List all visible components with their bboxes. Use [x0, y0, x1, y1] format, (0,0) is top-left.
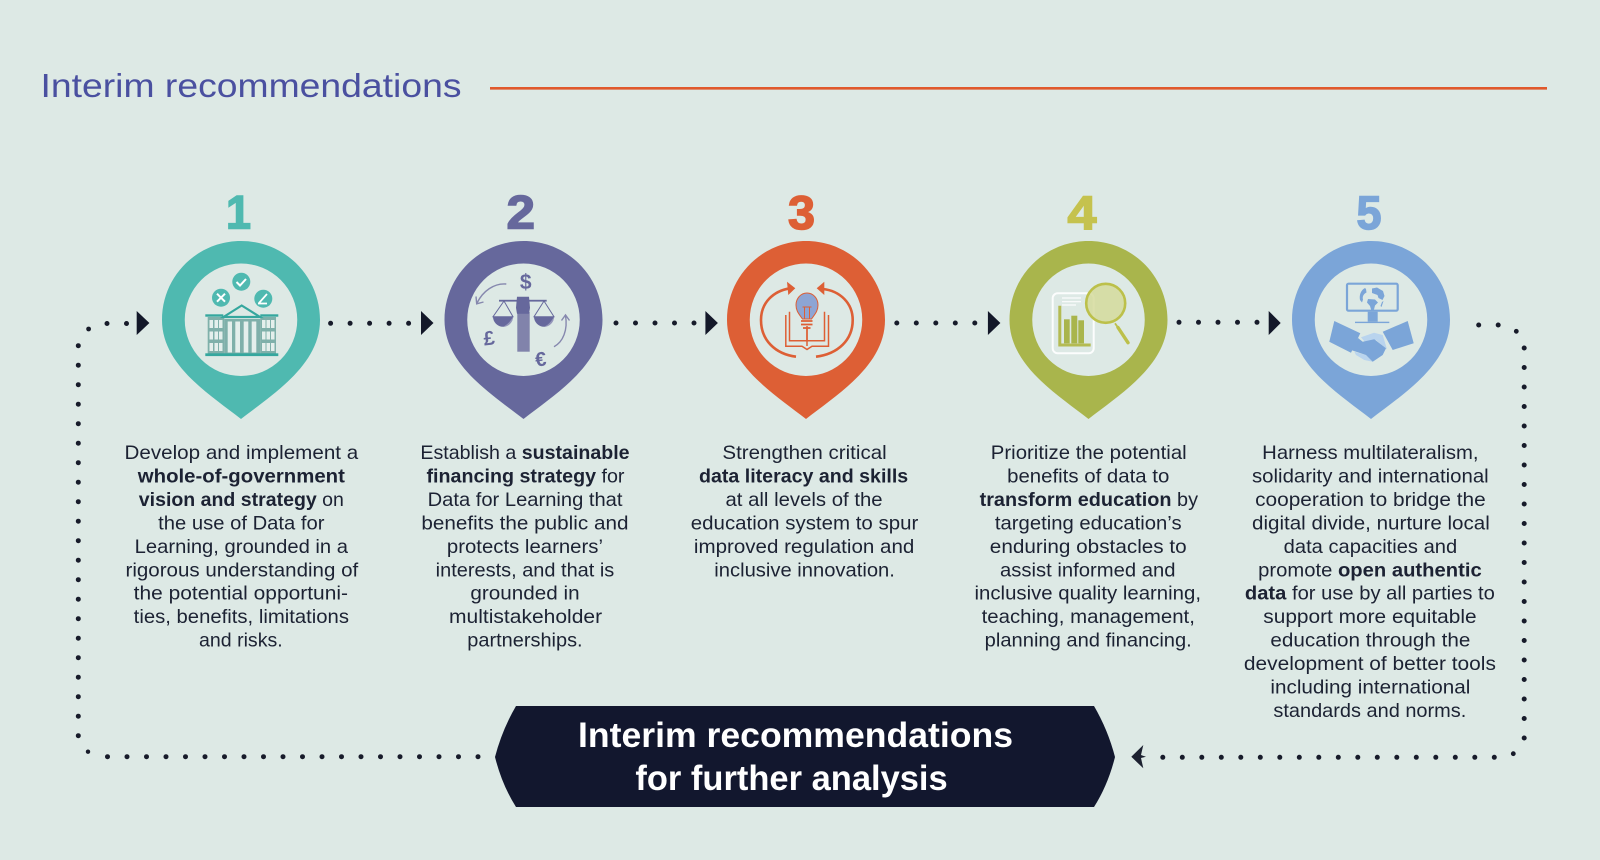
text: recommendation 4: enduring obstacles to [990, 536, 1187, 558]
dotted arrow: pin 3 to pin 4 [897, 311, 1000, 335]
dotted connector: pin 5 around right side to banner [1131, 325, 1524, 768]
text: recommendation 5: solidarity and international [1252, 466, 1489, 488]
text: recommendation 4: transform education by [980, 489, 1198, 511]
text: recommendation 5: Harness multilateralism, [1262, 442, 1478, 464]
text: recommendation 1: and risks. [199, 630, 283, 652]
step 3 [691, 186, 919, 581]
text: recommendation 5: development of better tools [1244, 653, 1496, 675]
number 4: 4 [1068, 186, 1096, 239]
dotted arrow: pin 2 to pin 3 [616, 311, 718, 335]
banner: interim recommendations for further analysis: for further analysis [635, 759, 948, 798]
text: recommendation 2: financing strategy for [426, 466, 625, 488]
text: recommendation 5: cooperation to bridge the [1255, 489, 1486, 511]
text: recommendation 3: data literacy and skills [699, 466, 908, 488]
text: recommendation 5: education through the [1270, 630, 1470, 652]
number 1: 1 [226, 186, 251, 238]
number 2: 2 [506, 186, 535, 238]
text: recommendation 4: Prioritize the potential [991, 442, 1187, 464]
icon: monitor with globe and handshake [1329, 284, 1414, 362]
text: recommendation 1: vision and strategy on [139, 489, 344, 511]
dotted connector: return path left side to pin 1 [78, 311, 478, 757]
text: recommendation 2: interests, and that is [436, 559, 615, 581]
text: recommendation 3: inclusive innovation. [714, 559, 895, 581]
text: recommendation 4: planning and financing. [985, 630, 1192, 652]
text: recommendation 5: promote open authentic [1258, 559, 1482, 581]
pin 3 [727, 241, 885, 419]
text: recommendation 1 [124, 442, 359, 652]
text: recommendation 2: Data for Learning that [428, 489, 623, 511]
step 5 [1244, 186, 1496, 722]
text: recommendation 5: data capacities and [1284, 536, 1457, 558]
step 2 [420, 186, 630, 652]
icon: scales and currencies [476, 271, 570, 372]
pin 1 [162, 241, 320, 419]
dotted arrow: pin 1 to pin 2 [331, 311, 434, 335]
text: recommendation 3: at all levels of the [726, 489, 883, 511]
text: recommendation 5: including international [1270, 676, 1470, 698]
text: recommendation 3: improved regulation and [694, 536, 914, 558]
text: recommendation 1: whole-of-government [137, 466, 345, 488]
text: recommendation 5: support more equitable [1263, 606, 1477, 628]
text: recommendation 2: partnerships. [467, 630, 583, 652]
text: recommendation 4: inclusive quality learning, [974, 583, 1201, 605]
banner: interim recommendations for further analysis [495, 706, 1115, 807]
step 1 [124, 186, 359, 652]
pin 4 [1010, 241, 1168, 419]
text: recommendation 4: benefits of data to [1007, 466, 1169, 488]
dotted arrow: pin 4 to pin 5 [1179, 311, 1281, 335]
text: recommendation 4: teaching, management, [982, 606, 1195, 628]
pin 5 [1292, 241, 1450, 419]
text: recommendation 5 [1244, 442, 1496, 722]
text: recommendation 1: the use of Data for [158, 512, 325, 534]
number 3: 3 [788, 186, 815, 239]
text: recommendation 1: rigorous understanding of [126, 559, 359, 581]
text: recommendation 2: protects learners’ [447, 536, 603, 558]
text: recommendation 4 [974, 442, 1201, 652]
text: recommendation 2: benefits the public and [421, 512, 628, 534]
text: recommendation 1: ties, benefits, limitations [134, 606, 349, 628]
icon: scales and currencies: € [534, 348, 547, 372]
icon: book, light bulb and cycle arrows [761, 282, 853, 357]
text: recommendation 2 [420, 442, 630, 652]
step 4 [974, 186, 1201, 652]
text: recommendation 5: standards and norms. [1273, 700, 1466, 722]
icon: scales and currencies: £ [482, 327, 496, 351]
icon: government building with decision badges [205, 273, 278, 356]
text: recommendation 5: data for use by all parties to [1245, 583, 1495, 605]
icon: document chart with magnifying glass [1053, 284, 1128, 353]
text: recommendation 3 [691, 442, 919, 581]
text: recommendation 3: Strengthen critical [722, 442, 887, 464]
text: recommendation 4: targeting education’s [995, 512, 1182, 534]
text: recommendation 3: education system to spur [691, 512, 919, 534]
text: recommendation 5: digital divide, nurture local [1252, 512, 1490, 534]
pin 2 [444, 241, 602, 419]
text: recommendation 2: Establish a sustainable [420, 442, 630, 464]
banner: interim recommendations for further analysis: Interim recommendations [578, 716, 1013, 755]
text: recommendation 2: grounded in [470, 583, 580, 605]
text: recommendation 4: assist informed and [1000, 559, 1176, 581]
text: recommendation 2: multistakeholder [449, 606, 603, 628]
icon: scales and currencies: $ [520, 271, 532, 294]
number 5: 5 [1356, 186, 1382, 239]
title: Interim recommendations [40, 67, 462, 104]
text: recommendation 1: Develop and implement a [124, 442, 358, 464]
text: recommendation 1: Learning, grounded in a [135, 536, 348, 558]
text: recommendation 1: the potential opportuni- [134, 583, 348, 605]
